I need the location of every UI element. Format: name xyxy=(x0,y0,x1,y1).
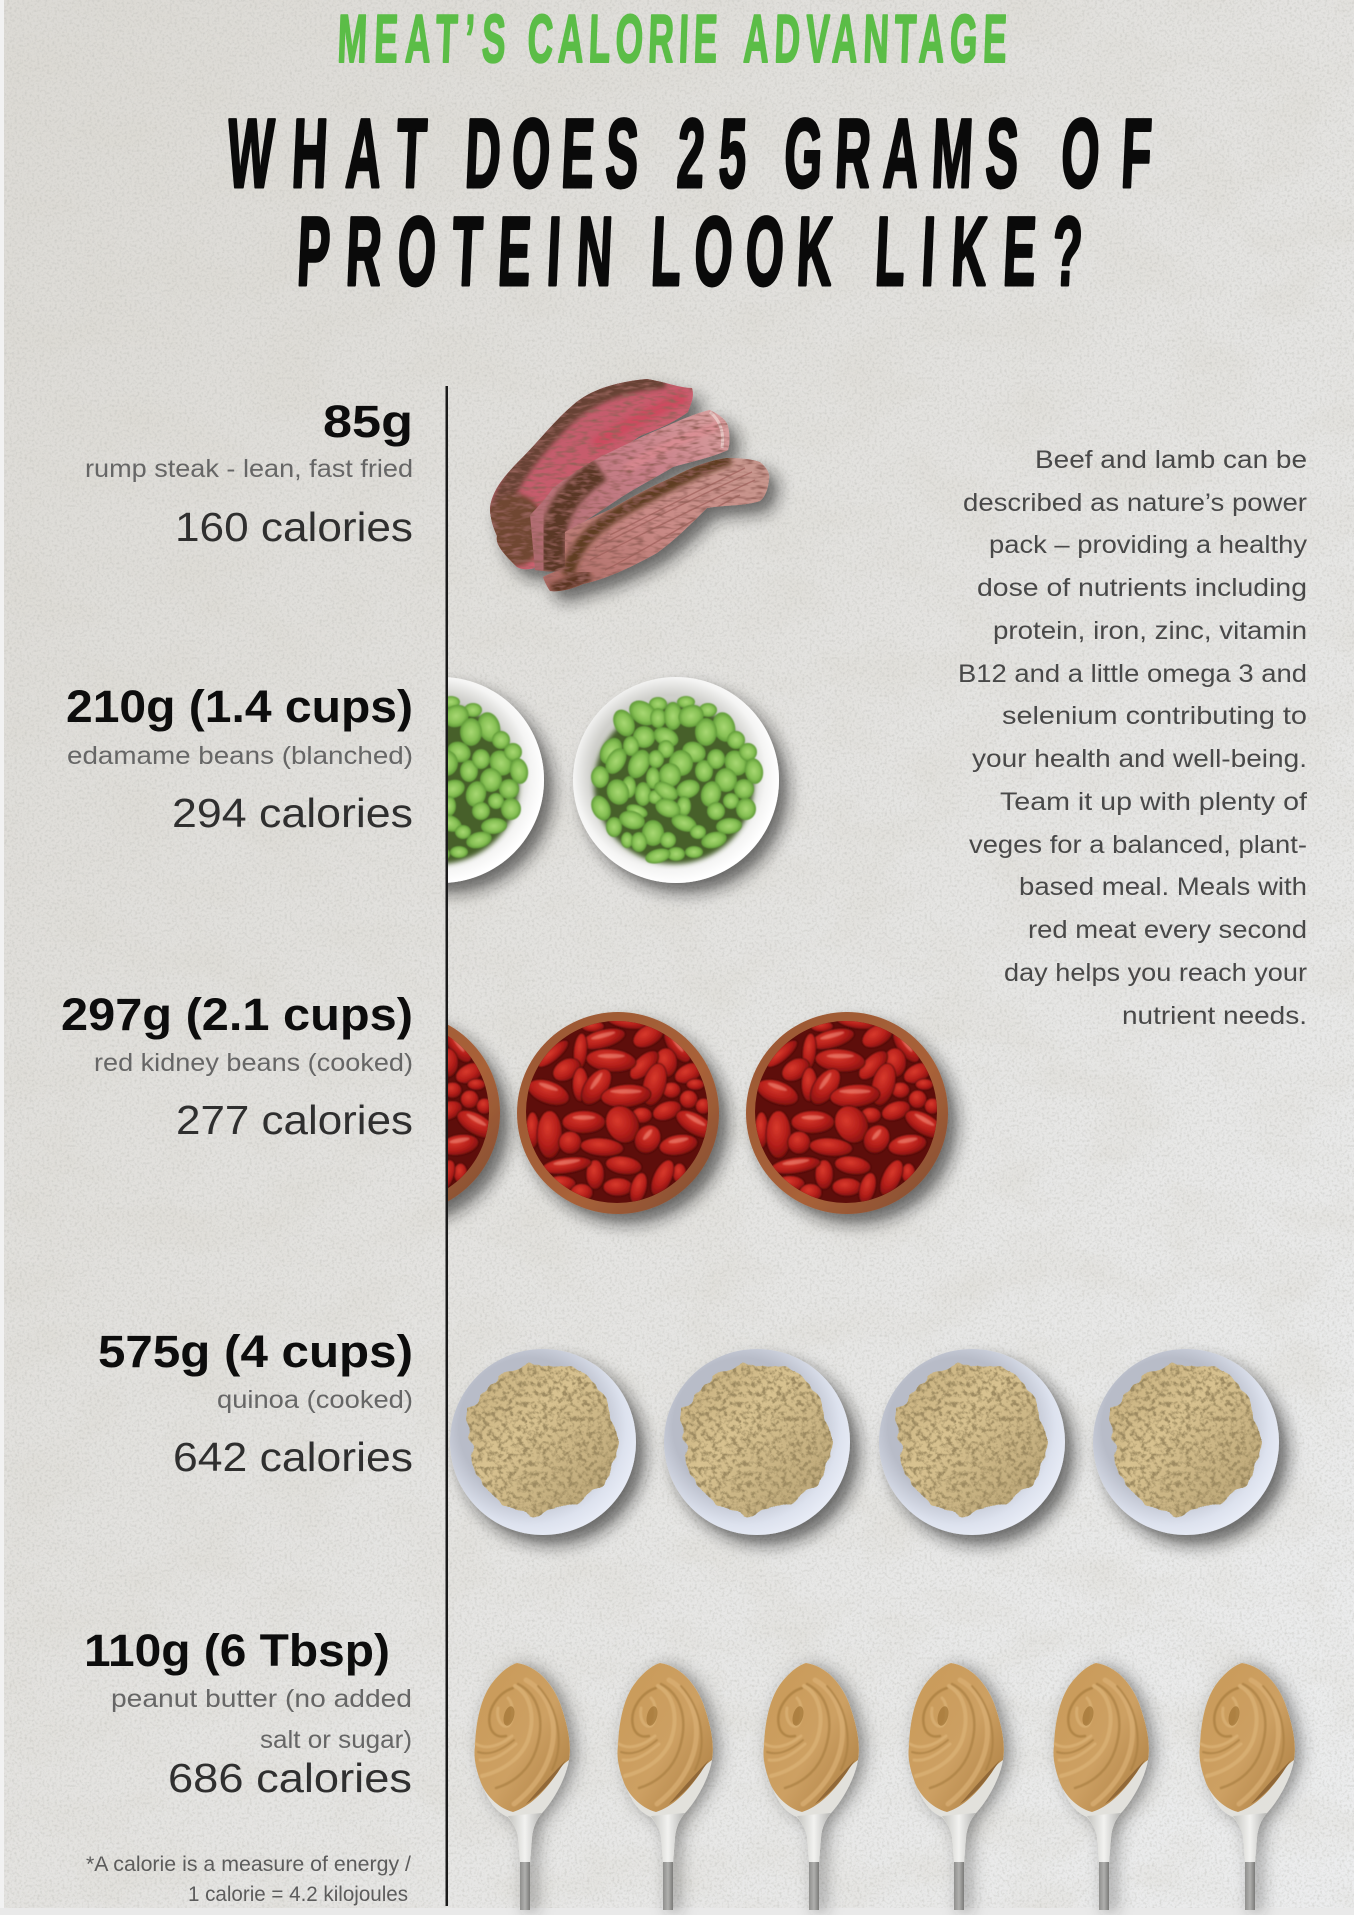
paragraph: beef and lamb: veges for a balanced, plant- xyxy=(969,831,1307,859)
text block: red kidney beans: 277 calories xyxy=(176,1097,413,1143)
paragraph: beef and lamb: Team it up with plenty of xyxy=(1000,788,1307,816)
text block: peanut butter: 686 calories xyxy=(168,1755,412,1801)
text block: quinoa: 575g (4 cups) xyxy=(98,1326,413,1377)
text block: peanut butter: salt or sugar) xyxy=(260,1726,412,1754)
title: What does 25 grams of protein look like?: PROTEIN xyxy=(295,198,615,306)
title: What does 25 grams of protein look like?: 25 xyxy=(675,100,749,208)
text block: quinoa: quinoa (cooked) xyxy=(217,1386,413,1414)
paragraph: beef and lamb: nutrient needs. xyxy=(1122,1002,1307,1030)
paragraph: beef and lamb: your health and well-being. xyxy=(972,745,1307,773)
paragraph: beef and lamb: selenium contributing to xyxy=(1002,702,1307,730)
text block: rump steak xyxy=(85,396,413,550)
text block: rump steak: 160 calories xyxy=(175,504,413,550)
title: What does 25 grams of protein look like?: OF xyxy=(1059,100,1154,208)
text block: peanut butter: peanut butter (no added xyxy=(111,1685,412,1713)
text block: edamame beans: 294 calories xyxy=(172,790,413,836)
paragraph: beef and lamb: protein, iron, zinc, vitamin xyxy=(993,617,1307,645)
paragraph: beef and lamb: B12 and a little omega 3 and xyxy=(958,660,1307,688)
heading: Meat's calorie advantage: MEAT’S xyxy=(336,2,507,77)
text block: rump steak: 85g xyxy=(323,396,413,447)
paragraph: beef and lamb: day helps you reach your xyxy=(1004,959,1307,987)
paragraph: beef and lamb: described as nature’s power xyxy=(963,489,1307,517)
paragraph: beef and lamb: Beef and lamb can be xyxy=(1035,446,1307,474)
text block: edamame beans: 210g (1.4 cups) xyxy=(66,681,413,732)
title: What does 25 grams of protein look like?: GRAMS xyxy=(782,100,1021,208)
text block: edamame beans: edamame beans (blanched) xyxy=(67,742,413,770)
icon row: quinoa bowls xyxy=(450,1349,1279,1535)
title: What does 25 grams of protein look like?: WHAT xyxy=(225,100,429,208)
text block: peanut butter: 110g (6 Tbsp) xyxy=(84,1625,390,1676)
vertical axis line xyxy=(446,386,448,1906)
icon row: kidney bean bowls xyxy=(448,1010,968,1236)
paragraph: beef and lamb xyxy=(958,446,1308,1030)
text block: quinoa: 642 calories xyxy=(173,1434,413,1480)
footnote: *A calorie is a measure of energy / xyxy=(86,1853,411,1876)
footnote: 1 calorie = 4.2 kilojoules xyxy=(188,1883,408,1906)
text block: red kidney beans xyxy=(61,989,413,1143)
text block: peanut butter xyxy=(84,1625,412,1801)
title: What does 25 grams of protein look like?: LOOK xyxy=(649,198,835,306)
text block: edamame beans xyxy=(66,681,413,836)
heading: Meat's calorie advantage: CALORIE xyxy=(526,2,719,77)
text block: quinoa xyxy=(98,1326,413,1480)
footnote xyxy=(86,1853,411,1906)
title: What does 25 grams of protein look like?: LIKE? xyxy=(873,198,1085,306)
icon: sliced steak xyxy=(480,370,775,600)
paragraph: beef and lamb: red meat every second xyxy=(1028,916,1307,944)
paragraph: beef and lamb: pack – providing a healthy xyxy=(989,531,1308,559)
title: What does 25 grams of protein look like? xyxy=(225,100,1154,306)
text block: red kidney beans: red kidney beans (cooked) xyxy=(94,1049,413,1077)
text block: rump steak: rump steak - lean, fast fried xyxy=(85,455,413,483)
paragraph: beef and lamb: based meal. Meals with xyxy=(1019,873,1307,901)
text block: red kidney beans: 297g (2.1 cups) xyxy=(61,989,413,1040)
icon row: peanut butter spoons xyxy=(475,1663,1295,1910)
title: What does 25 grams of protein look like?: DOES xyxy=(463,100,641,208)
heading: Meat's calorie advantage: ADVANTAGE xyxy=(742,2,1008,77)
heading: Meat's calorie advantage xyxy=(336,2,1008,77)
paragraph: beef and lamb: dose of nutrients including xyxy=(977,574,1307,602)
icon row: edamame bowls xyxy=(448,676,800,904)
